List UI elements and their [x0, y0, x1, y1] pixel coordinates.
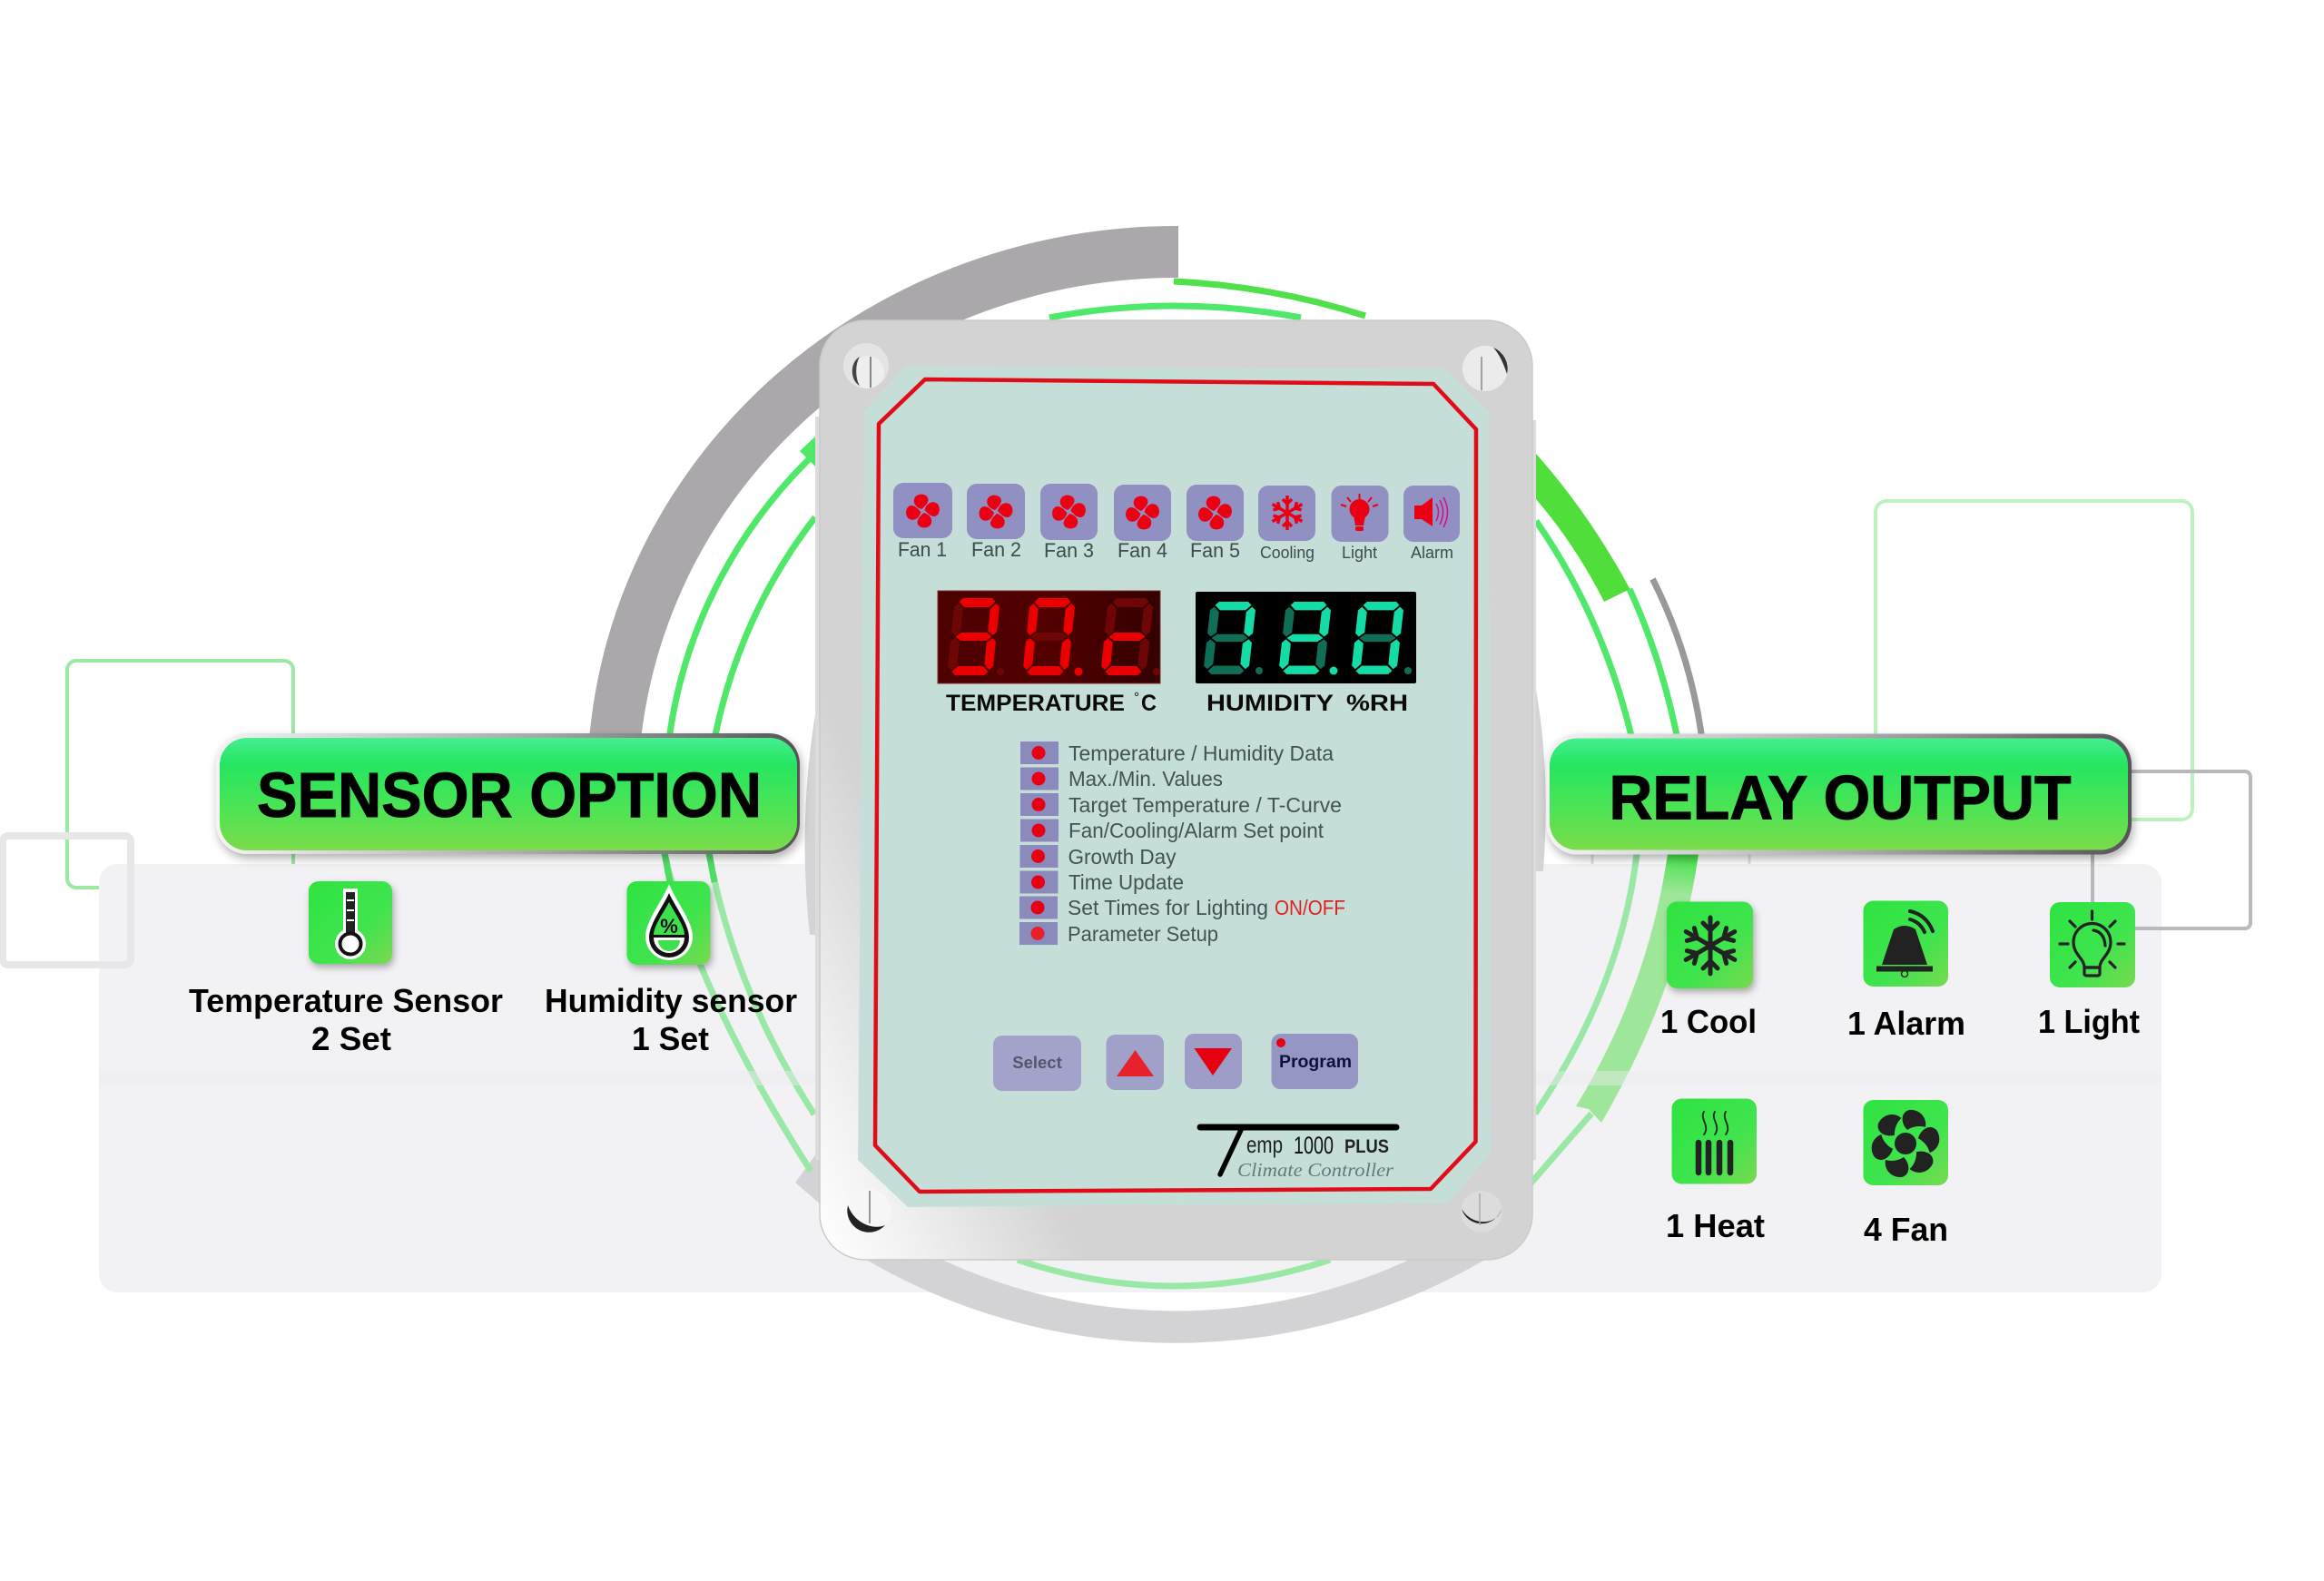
decorative frame: right green outline — [1876, 501, 2192, 820]
temperature label: TEMPERATURE — [946, 691, 1125, 716]
logo — [1200, 1127, 1396, 1181]
screw: bottom right — [1461, 1191, 1502, 1232]
device: climate controller — [815, 320, 1536, 1260]
humidity label: %RH — [1346, 691, 1408, 716]
relay: light — [2038, 902, 2140, 1040]
decorative frame: left green outline — [67, 661, 293, 888]
grey ring: bottom-left end — [795, 1153, 831, 1216]
icon: fan 1: Fan 1 — [898, 538, 947, 561]
heading: sensor option — [216, 733, 800, 854]
button: select: Select — [1012, 1053, 1062, 1072]
icon: fan 5 — [1187, 485, 1244, 562]
icon: light — [1331, 486, 1389, 562]
ring: thick light green arc lower right — [1576, 854, 1699, 1123]
status icons row — [893, 483, 1460, 562]
icon: fan — [1863, 1100, 1948, 1185]
list item: max min: Max./Min. Values — [1068, 767, 1223, 790]
relay: light: 1 Light — [2038, 1003, 2140, 1040]
digit: 3 — [947, 598, 1000, 675]
digit: 0 — [1351, 602, 1404, 674]
relay: alarm — [1847, 900, 1965, 1042]
icon: fan 1 — [893, 483, 952, 561]
heading: relay output: RELAY OUTPUT — [1609, 762, 2072, 833]
icon: heater — [1672, 1098, 1757, 1183]
icon: snowflake — [1667, 902, 1753, 988]
icon: thermometer — [309, 881, 392, 964]
temperature display — [938, 591, 1160, 683]
digit: C — [1100, 598, 1154, 675]
icon: alarm — [1403, 486, 1460, 562]
temperature label: ° — [1134, 690, 1139, 705]
icon: bell — [1863, 900, 1948, 987]
button: up — [1106, 1035, 1164, 1090]
button: down — [1185, 1034, 1242, 1089]
red outline — [875, 379, 1476, 1192]
logo: Climate Controller — [1237, 1159, 1394, 1181]
relay: fan — [1863, 1100, 1948, 1248]
relay: heat — [1666, 1098, 1765, 1244]
icon: fan 3: Fan 3 — [1044, 539, 1094, 562]
icon: fan 4 — [1114, 485, 1171, 562]
sensor: humidity: Humidity sensor — [545, 982, 797, 1019]
grey ring: bottom arc — [854, 1252, 1497, 1343]
humidity display — [1196, 592, 1416, 683]
device side rails — [815, 417, 1536, 1160]
logo: emp — [1246, 1131, 1283, 1158]
relay: alarm: 1 Alarm — [1847, 1005, 1965, 1042]
icon: alarm: Alarm — [1411, 544, 1453, 562]
list item: lighting: Set Times for Lighting — [1068, 896, 1268, 919]
list item: lighting — [1019, 896, 1345, 919]
list item: growth day — [1020, 845, 1177, 869]
list item: time update: Time Update — [1068, 870, 1184, 894]
humidity label: HUMIDITY — [1206, 691, 1334, 716]
decorative frame: right grey outline — [2093, 771, 2250, 928]
decorative frame: small grey outline — [1592, 817, 1749, 896]
icon: humidity drop: % — [660, 915, 678, 938]
grey crescents behind the device — [805, 690, 1546, 935]
face panel — [858, 366, 1492, 1207]
icon: light: Light — [1342, 544, 1377, 562]
digit: 0 — [1022, 598, 1076, 675]
icon: cooling — [1258, 486, 1315, 562]
sensor: humidity — [545, 881, 797, 1057]
icon: fan 2: Fan 2 — [971, 538, 1021, 561]
sensor: temperature: 2 Set — [311, 1020, 391, 1057]
sensor: temperature: Temperature Sensor — [189, 982, 503, 1019]
screw: bottom left — [847, 1189, 891, 1232]
icon: humidity drop — [626, 881, 710, 965]
icon: fan 4: Fan 4 — [1118, 539, 1167, 562]
relay: fan: 4 Fan — [1864, 1211, 1948, 1248]
list item: parameter setup: Parameter Setup — [1068, 922, 1218, 946]
list item: set point: Fan/Cooling/Alarm Set point — [1068, 819, 1324, 842]
icon: fan 5: Fan 5 — [1190, 539, 1240, 562]
button: program — [1271, 1034, 1358, 1089]
decorative frame: left grey outline — [3, 836, 131, 965]
humidity label — [1206, 691, 1408, 716]
digit: 7 — [1203, 602, 1256, 674]
icon: fan 3 — [1040, 484, 1098, 562]
icon: light bulb — [2050, 902, 2135, 987]
ring: green arrow tip left — [800, 437, 815, 466]
ring segments: green arcs — [665, 281, 1702, 1286]
grey ring: top-left arc — [589, 226, 1178, 740]
relay: heat: 1 Heat — [1666, 1207, 1765, 1244]
screw: top left — [843, 343, 889, 388]
list item: lighting: ON/OFF — [1275, 896, 1345, 919]
button: select — [993, 1036, 1081, 1091]
device body — [820, 320, 1532, 1260]
logo: 1000 — [1294, 1132, 1334, 1159]
panel divider band — [99, 1071, 2162, 1085]
list item: target temperature: Target Temperature / T-Curve — [1068, 793, 1342, 817]
icon: cooling: Cooling — [1260, 544, 1315, 562]
heading: relay output — [1547, 733, 2132, 855]
button: program: Program — [1279, 1053, 1352, 1072]
icon: fan 2 — [967, 484, 1025, 561]
panel: light grey background — [99, 864, 2162, 1292]
heading: sensor option: SENSOR OPTION — [257, 760, 762, 830]
digit: 2 — [1278, 602, 1332, 674]
sensor: temperature — [189, 881, 503, 1057]
list item: temperature humidity data: Temperature / Humidity Data — [1068, 741, 1334, 765]
logo: PLUS — [1344, 1136, 1389, 1157]
sensor: humidity: 1 Set — [632, 1020, 709, 1057]
relay: cool — [1660, 902, 1757, 1040]
temperature label: C — [1141, 691, 1157, 716]
screw: top right — [1462, 346, 1508, 391]
list item: time update — [1020, 870, 1184, 894]
list item: growth day: Growth Day — [1068, 845, 1177, 869]
relay: cool: 1 Cool — [1660, 1003, 1757, 1040]
ring: thick green arc top right — [1536, 454, 1630, 602]
indicator list — [1019, 741, 1345, 946]
